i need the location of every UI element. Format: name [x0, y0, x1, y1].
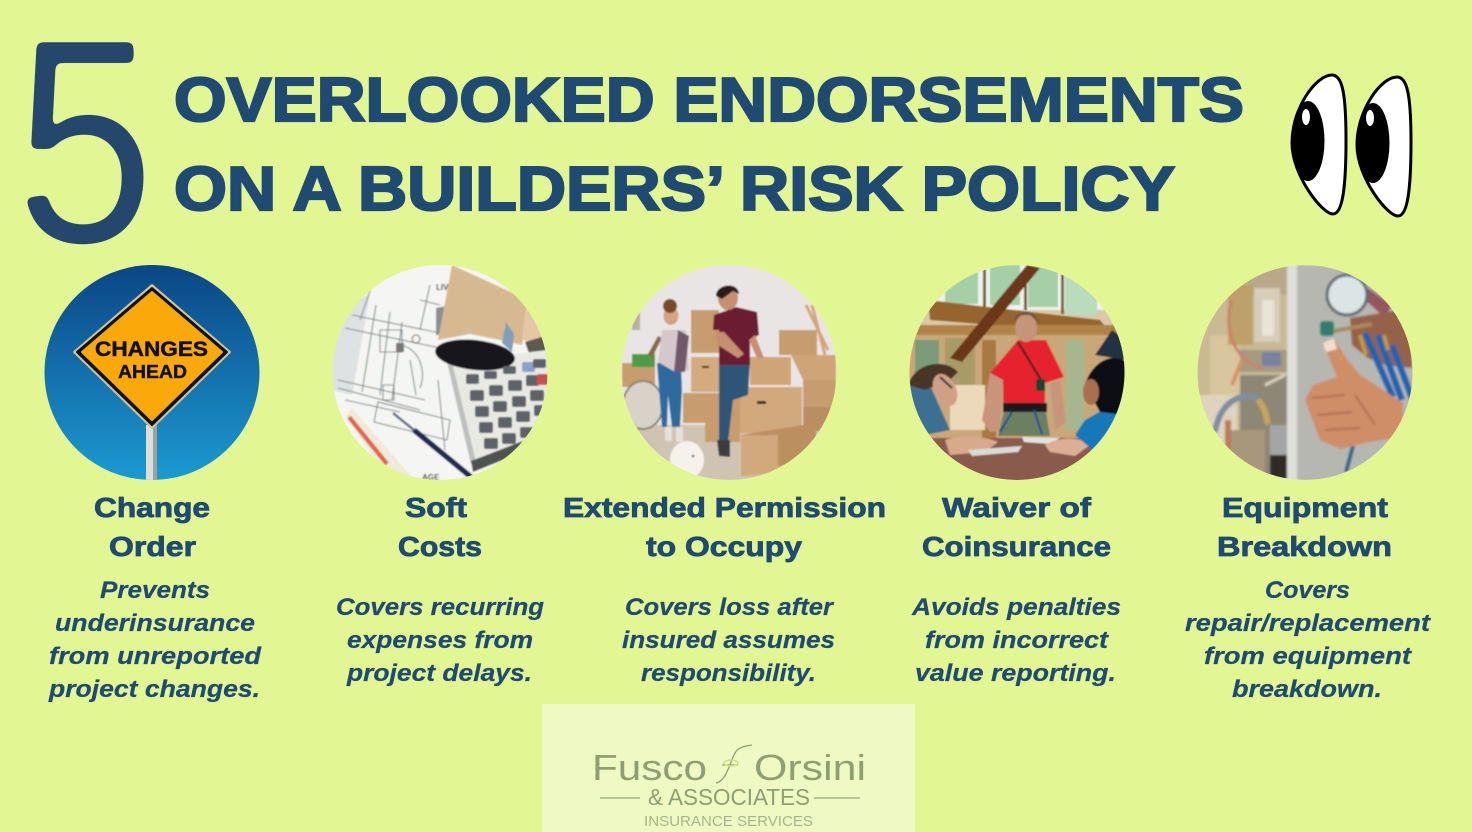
column 5: equipment breakdown [1185, 492, 1431, 703]
logo panel: Fusco Orsini & Associates: INSURANCE SERVICES [644, 813, 813, 830]
description: equipment breakdown: from equipment [1204, 643, 1412, 670]
description: waiver of coinsurance: value reporting. [915, 660, 1116, 687]
description: soft costs: expenses from [347, 627, 533, 654]
description: waiver of coinsurance: from incorrect [925, 627, 1109, 654]
photo: blueprints and calculator: AGE [422, 473, 440, 482]
description: waiver of coinsurance [911, 594, 1121, 687]
title: OVERLOOKED ENDORSEMENTS [174, 66, 1244, 135]
heading: soft costs: Soft [405, 492, 467, 523]
description: change order: from unreported [49, 643, 263, 670]
photo: blueprints and calculator [332, 265, 548, 482]
heading: extended permission [563, 492, 886, 562]
description: equipment breakdown [1185, 577, 1431, 703]
title [174, 66, 1244, 224]
column 3: extended permission to occupy [563, 492, 886, 687]
photo: blueprints and calculator: LIV [436, 283, 449, 292]
description: soft costs [336, 594, 544, 687]
description: equipment breakdown: Covers [1265, 577, 1350, 604]
column 1: change order [48, 492, 263, 703]
description: change order: underinsurance [55, 610, 255, 637]
title: ON A BUILDERS’ RISK POLICY [174, 155, 1175, 224]
logo panel: Fusco Orsini & Associates [542, 704, 915, 832]
heading: change order: Change [94, 492, 210, 523]
heading: equipment breakdown: Breakdown [1217, 531, 1392, 562]
description: extended permission [622, 594, 835, 687]
heading: soft costs [398, 492, 482, 562]
icon: cartoon eyes [1292, 75, 1411, 216]
description: equipment breakdown: breakdown. [1232, 676, 1382, 703]
heading: extended permission: Extended Permission [563, 492, 886, 523]
description: change order [48, 577, 263, 703]
heading: soft costs: Costs [398, 531, 482, 562]
description: extended permission: insured assumes [622, 627, 835, 654]
heading: change order [94, 492, 210, 562]
heading: change order: Order [109, 531, 196, 562]
photo: team meeting around table [908, 265, 1126, 483]
description: extended permission: responsibility. [641, 660, 816, 687]
description: change order: Prevents [100, 577, 210, 604]
photo: changes ahead road sign: CHANGES [95, 338, 208, 361]
heading: equipment breakdown [1217, 492, 1392, 562]
heading: waiver of coinsurance [922, 492, 1111, 562]
description: equipment breakdown: repair/replacement [1185, 610, 1431, 637]
photo: couple moving boxes [620, 265, 838, 481]
logo panel: Fusco Orsini & Associates: Orsini [754, 747, 866, 788]
photo: changes ahead road sign [44, 265, 260, 481]
logo panel: Fusco Orsini & Associates: Fusco [592, 747, 707, 788]
heading: waiver of coinsurance: Waiver of [942, 492, 1092, 523]
photo: technician thumbs up [1197, 265, 1418, 481]
description: waiver of coinsurance: Avoids penalties [911, 594, 1121, 621]
heading: extended permission: to Occupy [646, 531, 802, 562]
description: extended permission: Covers loss after [625, 594, 835, 621]
heading: waiver of coinsurance: Coinsurance [922, 531, 1111, 562]
description: soft costs: Covers recurring [336, 594, 544, 621]
description: change order: project changes. [48, 676, 260, 703]
column 4: waiver of coinsurance [911, 492, 1121, 687]
logo panel: Fusco Orsini & Associates: & ASSOCIATES [648, 784, 810, 810]
photo: changes ahead road sign: AHEAD [118, 362, 187, 382]
column 2: soft costs [336, 492, 544, 687]
description: soft costs: project delays. [346, 660, 532, 687]
heading: equipment breakdown: Equipment [1222, 492, 1388, 523]
